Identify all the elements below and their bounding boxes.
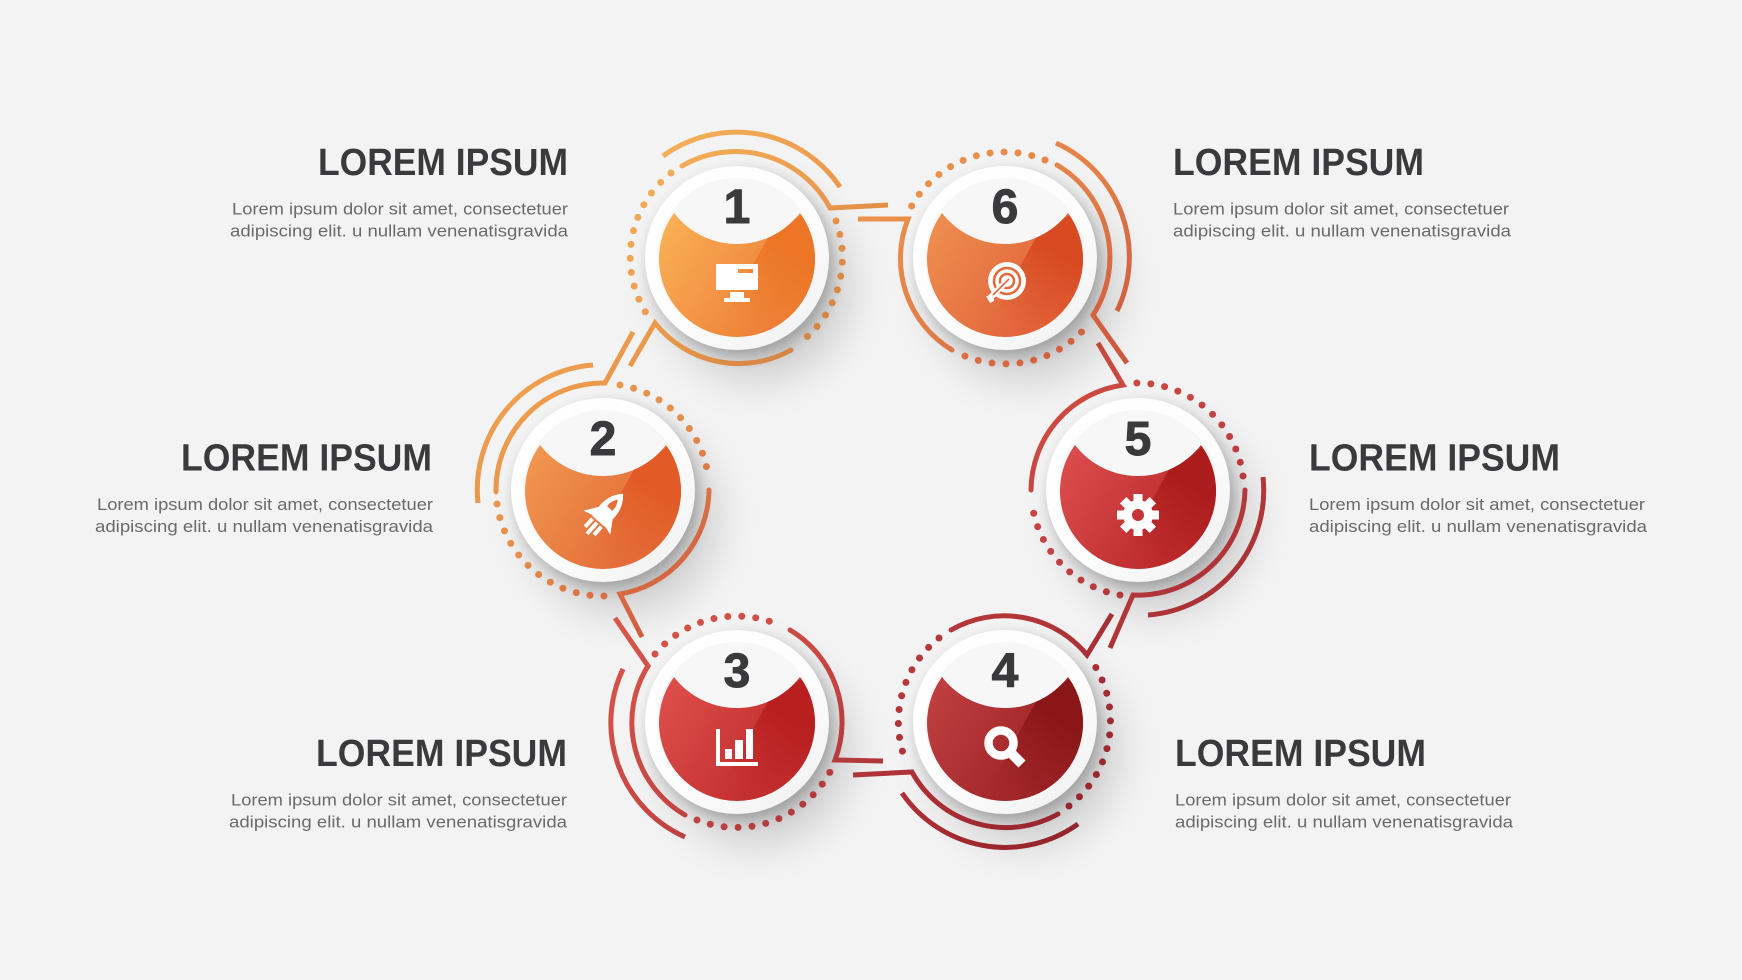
text block 6: LOREM IPSUM (1173, 142, 1424, 184)
text block 6: adipiscing elit. u nullam venenatisgravida (1173, 222, 1512, 240)
text block 3 (229, 733, 568, 832)
step 3 node (611, 616, 883, 842)
icon: gear (1117, 494, 1159, 536)
text block 3: LOREM IPSUM (316, 733, 567, 775)
text block 2: LOREM IPSUM (181, 438, 432, 480)
text block 1: LOREM IPSUM (318, 142, 568, 184)
number 4: 4 (992, 645, 1019, 698)
icon: monitor (716, 264, 758, 302)
text block 5: adipiscing elit. u nullam venenatisgravida (1309, 517, 1648, 536)
text block 1 (230, 142, 569, 240)
text block 2 (95, 438, 434, 536)
number 5: 5 (1125, 413, 1151, 466)
icon: rocket (574, 482, 636, 546)
text block 5 (1309, 438, 1648, 536)
text block 3: Lorem ipsum dolor sit amet, consectetuer (231, 790, 567, 810)
text block 1: adipiscing elit. u nullam venenatisgravida (230, 222, 569, 240)
text block 5: Lorem ipsum dolor sit amet, consectetuer (1309, 495, 1645, 514)
number 3: 3 (724, 645, 750, 698)
text block 6 (1173, 142, 1512, 240)
step 6 node (858, 143, 1129, 378)
number 2: 2 (590, 413, 616, 466)
text block 1: Lorem ipsum dolor sit amet, consectetuer (232, 200, 568, 218)
step 2 node (477, 332, 715, 637)
step 1 node (630, 132, 888, 378)
text block 4: Lorem ipsum dolor sit amet, consectetuer (1175, 790, 1511, 810)
text block 2: Lorem ipsum dolor sit amet, consectetuer (97, 495, 433, 514)
text block 6: Lorem ipsum dolor sit amet, consectetuer (1173, 200, 1509, 218)
icon: bar chart (716, 729, 758, 766)
text block 4: LOREM IPSUM (1175, 733, 1426, 775)
text block 4 (1175, 733, 1514, 832)
step 4 node (853, 614, 1117, 847)
text block 3: adipiscing elit. u nullam venenatisgravida (229, 812, 568, 832)
icon: target (986, 262, 1026, 303)
icon: magnifier (988, 730, 1022, 764)
text block 2: adipiscing elit. u nullam venenatisgravida (95, 517, 434, 536)
text block 5: LOREM IPSUM (1309, 438, 1560, 480)
number 6: 6 (992, 181, 1018, 234)
text block 4: adipiscing elit. u nullam venenatisgravida (1175, 812, 1514, 832)
number 1: 1 (724, 181, 750, 234)
infographic canvas (96, 130, 1647, 858)
step 5 node (1031, 343, 1264, 648)
